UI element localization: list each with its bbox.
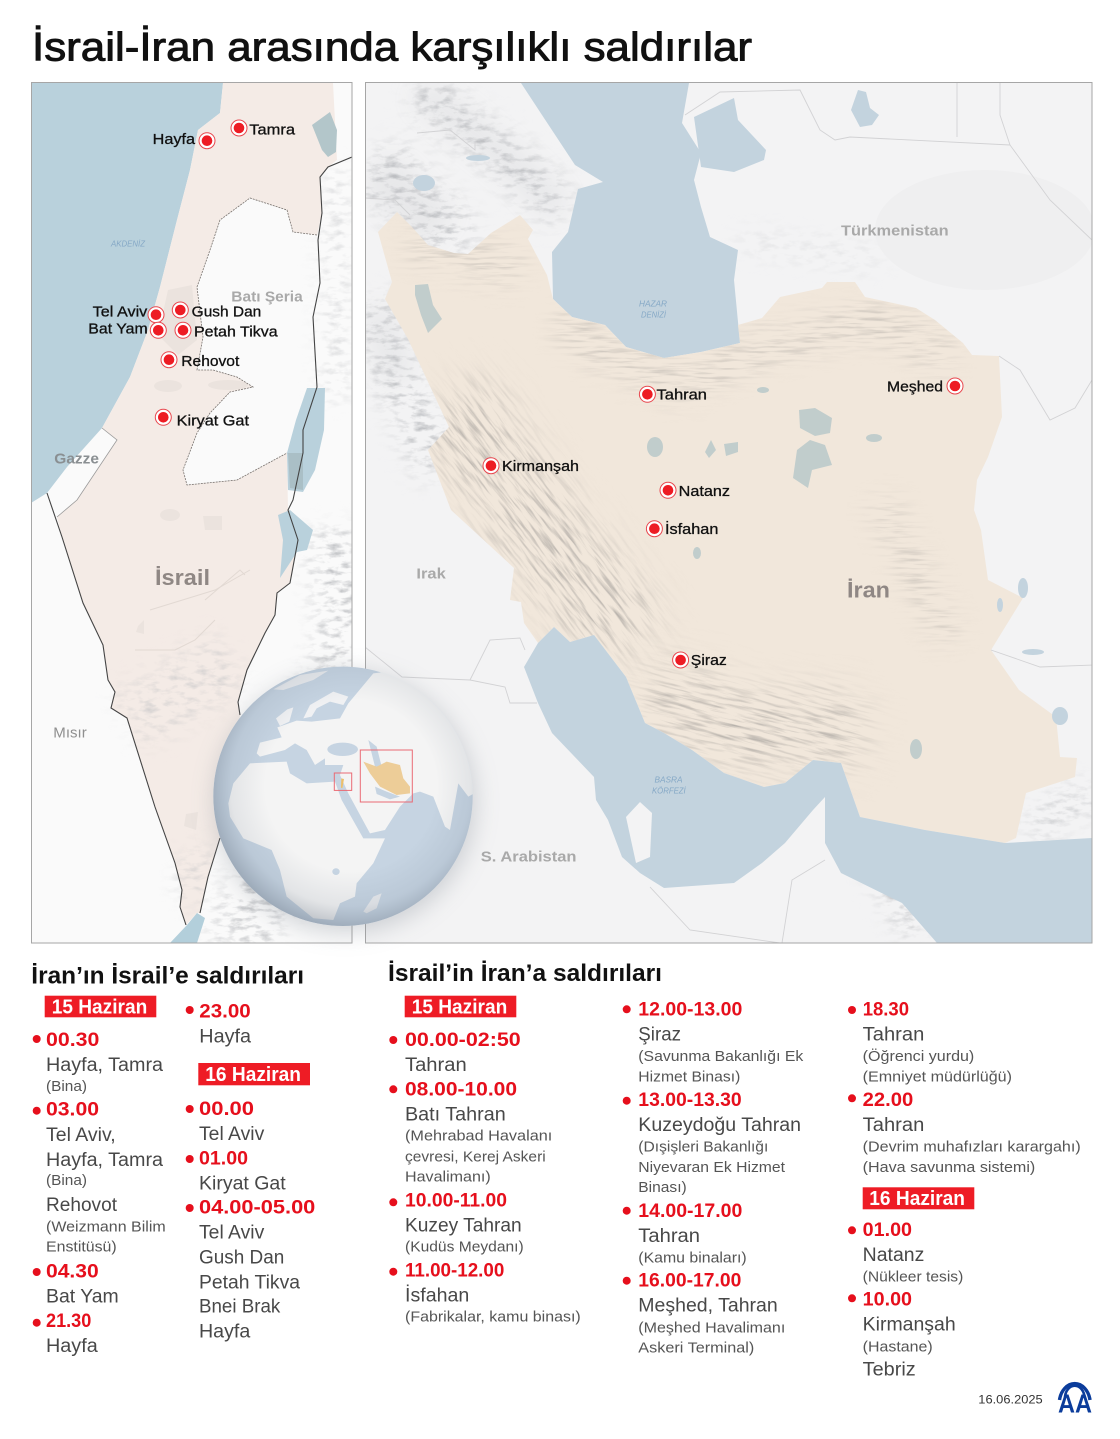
- Persian Gulf and Gulf of Oman: [524, 627, 1093, 943]
- globe locator box: Iran: [360, 750, 412, 802]
- West Bank border: [183, 198, 317, 485]
- entry: 08.00-10.00: Havalimanı): [405, 1169, 491, 1186]
- entry: 10.00-11.00: (Kudüs Meydanı): [405, 1239, 524, 1256]
- entry: 16.00-17.00: Askeri Terminal): [638, 1340, 754, 1357]
- entry: 12.00-13.00: [623, 1000, 804, 1085]
- entry: 00.00: 00.00: [199, 1099, 254, 1120]
- list: Israel attacks column 2: [623, 1000, 804, 1357]
- entry: 18.30: (Emniyet müdürlüğü): [863, 1068, 1012, 1085]
- Dead Sea: [287, 388, 325, 492]
- entry: 01.00: (Nükleer tesis): [863, 1268, 963, 1285]
- entry: 04.00-05.00: 04.00-05.00: [199, 1198, 315, 1219]
- pin: Petah Tikva: Petah Tikva: [194, 323, 278, 340]
- label: S. Arabistan: S. Arabistan: [481, 849, 576, 866]
- label: İsrail: İsrail: [155, 565, 210, 590]
- entry: 14.00-17.00: 14.00-17.00: [638, 1201, 742, 1222]
- entry: 00.30: (Bina): [46, 1078, 87, 1095]
- entry: 03.00: [33, 1100, 166, 1256]
- list: Iran attacks column 2: [186, 1001, 315, 1343]
- lakes in Iran: [415, 284, 922, 759]
- entry: 03.00: Tel Aviv,: [46, 1125, 116, 1146]
- entry: 03.00: Enstitüsü): [46, 1239, 117, 1256]
- entry: 10.00-11.00: Kuzey Tahran: [405, 1216, 522, 1237]
- entry: 12.00-13.00: Hizmet Binası): [638, 1068, 740, 1085]
- Gulf of Aqaba: [170, 913, 205, 943]
- pin: Natanz: [660, 482, 730, 500]
- entry: 03.00: Rehovot: [46, 1195, 118, 1216]
- entry: 00.00-02:50: 00.00-02:50: [405, 1030, 521, 1051]
- entry: 18.30: 18.30: [863, 1000, 909, 1021]
- entry: 14.00-17.00: [623, 1201, 747, 1266]
- Egypt border line: [47, 493, 186, 925]
- entry: 18.30: [848, 1000, 1012, 1085]
- globe land: Africa: [228, 762, 385, 920]
- entry: 21.30: Hayfa: [46, 1336, 98, 1357]
- pin: Meşhed: Meşhed: [887, 379, 943, 396]
- entry: 08.00-10.00: 08.00-10.00: [405, 1079, 517, 1100]
- entry: 04.00-05.00: Bnei Brak: [199, 1297, 281, 1318]
- pin: Meşhed: [887, 378, 963, 396]
- pin: Tamra: Tamra: [249, 121, 296, 138]
- entry: 14.00-17.00: Tahran: [638, 1226, 700, 1247]
- entry: 22.00: (Devrim muhafızları karargahı): [863, 1138, 1081, 1155]
- globe seas: Black Sea, Caspian, Persian Gulf, lake: [327, 740, 400, 875]
- entry: 03.00: Hayfa, Tamra: [46, 1150, 163, 1171]
- label: İran: İran: [847, 578, 890, 603]
- pin: Tamra: [231, 120, 296, 138]
- entry: 22.00: 22.00: [863, 1090, 913, 1111]
- entry: 00.30: Hayfa, Tamra: [46, 1055, 163, 1076]
- entry: 00.30: 00.30: [46, 1030, 99, 1051]
- entry: 16.00-17.00: Meşhed, Tahran: [638, 1296, 778, 1317]
- entry: 10.00-11.00: 10.00-11.00: [405, 1191, 507, 1212]
- entry: 23.00: 23.00: [199, 1001, 251, 1022]
- entry: 13.00-13.30: [623, 1090, 801, 1196]
- entry: 22.00: Tahran: [863, 1115, 924, 1136]
- entry: 14.00-17.00: (Kamu binaları): [638, 1249, 747, 1266]
- entry: 08.00-10.00: [389, 1079, 552, 1186]
- entry: 13.00-13.30: Niyevaran Ek Hizmet: [638, 1159, 786, 1176]
- date stamp: 16.06.2025: [978, 1392, 1043, 1406]
- entry: 00.00: Tel Aviv: [199, 1124, 265, 1145]
- entry: 03.00: 03.00: [46, 1100, 99, 1121]
- date badge: 16 Haziran: 16 Haziran: [869, 1188, 965, 1210]
- sea: Mediterranean: [31, 82, 223, 503]
- entry: 18.30: Tahran: [863, 1025, 924, 1046]
- globe locator box: Israel: [334, 773, 352, 790]
- pin: Gush Dan: [172, 302, 261, 321]
- sea of Galilee: [312, 112, 337, 157]
- entry: 13.00-13.30: Kuzeydoğu Tahran: [638, 1115, 801, 1136]
- entry: 10.00-11.00: [389, 1191, 524, 1256]
- entry: 23.00: [186, 1001, 251, 1048]
- Israel territory: [57, 83, 337, 925]
- pin: Hayfa: [153, 131, 215, 149]
- sea label: Basra Körfezi: KÖRFEZİ: [652, 786, 686, 795]
- entry: 12.00-13.00: (Savunma Bakanlığı Ek: [638, 1048, 804, 1065]
- entry: 13.00-13.30: (Dışişleri Bakanlığı: [638, 1138, 768, 1155]
- entry: 11.00-12.00: 11.00-12.00: [405, 1260, 504, 1281]
- sea label: Hazar Denizi: DENİZİ: [641, 311, 667, 320]
- entry: 08.00-10.00: Batı Tahran: [405, 1104, 506, 1125]
- label: Gazze: Gazze: [54, 450, 99, 467]
- entry: 04.00-05.00: Tel Aviv: [199, 1223, 265, 1244]
- entry: 10.00: Tebriz: [863, 1360, 916, 1381]
- pin: Tahran: Tahran: [656, 386, 707, 403]
- entry: 11.00-12.00: İsfahan: [405, 1285, 469, 1306]
- entry: 21.30: [33, 1311, 98, 1357]
- entry: 01.00: 01.00: [199, 1148, 248, 1169]
- date badge: 16 Haziran: 16 Haziran: [205, 1064, 301, 1086]
- label: Irak: Irak: [416, 565, 447, 582]
- Gaza border: [57, 428, 117, 517]
- date badge: 15 Haziran: 15 Haziran: [52, 996, 147, 1018]
- pin: Gush Dan: Gush Dan: [192, 304, 261, 321]
- entry: 04.30: Bat Yam: [46, 1287, 119, 1308]
- entry: 00.00-02:50: Tahran: [405, 1055, 467, 1076]
- entry: 00.30: [33, 1030, 163, 1095]
- entry: 23.00: Hayfa: [199, 1027, 251, 1048]
- pin: Rehovot: Rehovot: [181, 353, 240, 370]
- entry: 01.00: 01.00: [863, 1220, 912, 1241]
- pin: İsfahan: İsfahan: [665, 520, 718, 538]
- date badge: 15 Haziran: 15 Haziran: [412, 996, 507, 1018]
- heading: Israel attacks: İsrail’in İran’a saldırıları: [388, 960, 662, 987]
- label: Mısır: Mısır: [53, 724, 87, 741]
- entry: 13.00-13.30: Binası): [638, 1179, 687, 1196]
- pin: Şiraz: [673, 652, 727, 669]
- pin: Şiraz: Şiraz: [691, 652, 727, 669]
- pin: Natanz: Natanz: [679, 483, 730, 500]
- entry: 03.00: (Bina): [46, 1172, 87, 1189]
- entry: 18.30: (Öğrenci yurdu): [863, 1047, 974, 1065]
- entry: 04.30: 04.30: [46, 1262, 99, 1283]
- entry: 04.00-05.00: Hayfa: [199, 1322, 251, 1343]
- entry: 08.00-10.00: çevresi, Kerej Askeri: [405, 1148, 546, 1165]
- entry: 12.00-13.00: Şiraz: [638, 1025, 681, 1046]
- entry: 04.30: [33, 1262, 119, 1308]
- entry: 01.00: Natanz: [863, 1245, 924, 1266]
- entry: 00.00: [186, 1099, 265, 1145]
- label: Batı Şeria: Batı Şeria: [231, 288, 303, 305]
- Iran relief shading: [407, 228, 962, 783]
- entry: 04.00-05.00: Gush Dan: [199, 1247, 284, 1268]
- Iran territory: [378, 212, 1077, 843]
- entry: 04.00-05.00: [186, 1198, 315, 1343]
- entry: 12.00-13.00: 12.00-13.00: [638, 1000, 742, 1021]
- pin: Kirmanşah: Kirmanşah: [502, 458, 579, 475]
- sea label: Hazar Denizi: [639, 300, 667, 318]
- pin: Rehovot: [161, 352, 240, 370]
- pin: Hayfa: Hayfa: [153, 131, 196, 148]
- entry: 08.00-10.00: (Mehrabad Havalanı: [405, 1128, 552, 1145]
- entry: 11.00-12.00: [389, 1260, 581, 1326]
- heading: Iran attacks: İran’ın İsrail’e saldırıları: [31, 962, 304, 989]
- sea label: Basra Körfezi: BASRA: [654, 775, 682, 784]
- pin: Bat Yam: [88, 320, 166, 338]
- entry: 01.00: Kiryat Gat: [199, 1173, 286, 1194]
- entry: 10.00: 10.00: [863, 1290, 912, 1311]
- entry: 16.00-17.00: 16.00-17.00: [638, 1271, 741, 1292]
- label: Türkmenistan: Türkmenistan: [841, 223, 949, 240]
- globe highlight: Iran: [363, 762, 410, 795]
- entry: 00.00-02:50: [389, 1030, 521, 1076]
- logo: AA: AA: [1058, 1389, 1092, 1419]
- entry: 16.00-17.00: [623, 1271, 785, 1357]
- pin: Tel Aviv: Tel Aviv: [93, 304, 148, 321]
- globe land: Eurasia: [257, 670, 480, 833]
- pin: Bat Yam: Bat Yam: [88, 320, 148, 337]
- sea label: Basra Körfezi: [652, 776, 686, 794]
- entry: 01.00: [848, 1220, 963, 1285]
- entry: 22.00: (Hava savunma sistemi): [863, 1159, 1035, 1176]
- pin: Tahran: [639, 386, 707, 403]
- title: İsrail-İran arasında karşılıklı saldırılar: [32, 25, 752, 70]
- southern salt pans: [278, 510, 313, 578]
- eastern lakes: [997, 578, 1068, 725]
- list: Israel attacks column 3: [848, 1000, 1081, 1381]
- entry: 01.00: [186, 1148, 286, 1194]
- Caspian Sea: [521, 83, 740, 358]
- entry: 10.00: [848, 1290, 956, 1381]
- entry: 16.00-17.00: (Meşhed Havalimanı: [638, 1319, 785, 1336]
- panel: Iran map: [366, 83, 1092, 942]
- pin: Kiryat Gat: [155, 409, 250, 429]
- sea label: Akdeniz: AKDENİZ: [110, 239, 146, 248]
- pin: İsfahan: [646, 520, 718, 538]
- Qatar: [626, 802, 652, 863]
- entry: 10.00: (Hastane): [863, 1338, 933, 1355]
- entry: 04.00-05.00: Petah Tikva: [199, 1272, 300, 1293]
- pin: Tel Aviv: [93, 304, 164, 323]
- list: Iran attacks column 1: [33, 996, 166, 1357]
- pin: Kiryat Gat: Kiryat Gat: [177, 412, 250, 429]
- entry: 03.00: (Weizmann Bilim: [46, 1219, 166, 1236]
- entry: 21.30: 21.30: [46, 1311, 91, 1332]
- Aral and northern lakes: [413, 90, 879, 191]
- globe land: Britain and Scandinavia: [276, 692, 348, 726]
- entry: 13.00-13.30: 13.00-13.30: [638, 1090, 742, 1111]
- panel: Israel map: [31, 82, 352, 943]
- entry: 10.00: Kirmanşah: [863, 1315, 956, 1336]
- entry: 11.00-12.00: (Fabrikalar, kamu binası): [405, 1309, 581, 1326]
- entry: 22.00: [848, 1090, 1081, 1176]
- globe locator: [213, 667, 480, 932]
- country borders: [365, 83, 1093, 943]
- list: Israel attacks column 1: [389, 996, 581, 1326]
- globe highlight: Israel: [341, 778, 344, 788]
- globe land: Greenland edge and Madagascar: [273, 671, 382, 913]
- sea label: Hazar Denizi: HAZAR: [639, 300, 667, 309]
- eastern border line: [238, 157, 352, 715]
